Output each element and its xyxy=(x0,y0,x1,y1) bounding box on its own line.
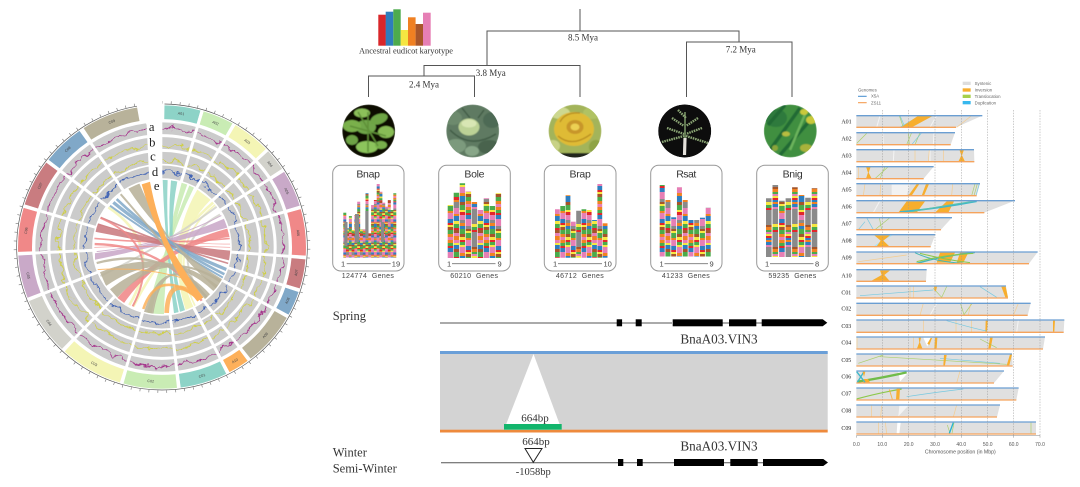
grey data rings xyxy=(41,128,283,366)
row A10: A10 xyxy=(841,274,852,280)
Bnap scale: 1 xyxy=(341,260,345,268)
x axis xyxy=(853,436,1045,455)
chromosome labels: A06 xyxy=(296,230,300,236)
Bnig scale: 8 xyxy=(815,260,819,268)
Bnig scale xyxy=(765,260,819,268)
row A07 xyxy=(841,218,952,230)
row C03 xyxy=(841,320,1064,332)
Rsat scale: 9 xyxy=(710,260,714,268)
tick mask at the open top gap xyxy=(137,97,162,108)
chromosome labels: A10 xyxy=(231,358,239,364)
outer chromosome band ring xyxy=(25,112,299,382)
row C07 xyxy=(841,388,1019,400)
legend: annotations: Syntenic xyxy=(975,81,992,86)
track letters a to e: e xyxy=(154,179,160,193)
label: ancestral eudicot karyotype: Ancestral eudicot karyotype xyxy=(359,46,453,55)
Bole scale: 1 xyxy=(447,260,451,268)
chromosome labels: A07 xyxy=(294,269,299,276)
x axis: 10.0 xyxy=(877,442,887,448)
Brap scale: 1 xyxy=(553,260,557,268)
Brap gene count: 46712 Genes xyxy=(556,273,604,280)
Bnig scale: 1 xyxy=(765,260,769,268)
Bole karyotype bars xyxy=(448,183,501,258)
Bnig title: Bnig xyxy=(783,168,803,180)
legend: genomes: Genomes xyxy=(858,88,877,93)
x axis: 30.0 xyxy=(930,442,940,448)
x axis: 60.0 xyxy=(1009,442,1019,448)
row A09: A09 xyxy=(841,256,852,262)
chromosome labels: C02 xyxy=(147,379,154,384)
panel: synteny chart xyxy=(841,81,1064,455)
legend: annotations xyxy=(963,81,1001,105)
panel: Brap xyxy=(544,165,616,280)
row C03: C03 xyxy=(841,324,851,330)
x axis: 50.0 xyxy=(983,442,993,448)
legend: annotations: Translocation xyxy=(975,94,1001,99)
gene model: Spring xyxy=(440,319,827,326)
Brap scale xyxy=(553,260,612,268)
chromosome labels: C04 xyxy=(45,319,52,327)
chromosome labels: A03 xyxy=(243,138,251,145)
Brap scale: 10 xyxy=(604,260,612,268)
row A01: A01 xyxy=(841,119,852,125)
x axis: 40.0 xyxy=(956,442,966,448)
row A04 xyxy=(841,167,934,179)
legend: genomes: X5A xyxy=(871,94,879,99)
row C05: C05 xyxy=(841,358,851,364)
Bnap gene count: 124774 Genes xyxy=(342,273,394,280)
icon: Bnig plant photo xyxy=(764,104,817,158)
Bnig gene count: 59235 Genes xyxy=(768,273,817,280)
phylogenetic tree xyxy=(368,9,792,97)
label: -1058bp: -1058bp xyxy=(516,467,551,478)
row C08 xyxy=(841,405,1000,417)
chromosome labels: C01 xyxy=(198,373,206,379)
Rsat karyotype bars xyxy=(660,185,711,256)
row C09: C09 xyxy=(841,426,851,432)
x axis: 0.0 xyxy=(853,442,860,448)
icon: Rsat plant photo xyxy=(658,104,711,158)
white radial gaps between chromosomes xyxy=(15,99,309,391)
row C04: C04 xyxy=(841,341,851,347)
tree divergence labels xyxy=(409,32,756,90)
Bnap title: Bnap xyxy=(356,168,380,180)
row A07: A07 xyxy=(841,221,852,227)
white insertion triangle xyxy=(504,354,562,430)
row C08: C08 xyxy=(841,409,851,415)
chromosome labels: A04 xyxy=(266,160,273,168)
Rsat title: Rsat xyxy=(676,168,696,180)
tree divergence labels: 8.5 Mya xyxy=(568,32,598,42)
Bole gene count: 60210 Genes xyxy=(450,273,499,280)
blue genome bar xyxy=(440,351,828,354)
panel: Rsat xyxy=(651,165,722,280)
chromosome labels: C05 xyxy=(25,272,31,279)
panel: Bnig xyxy=(757,165,828,280)
panel: circos plot xyxy=(15,97,309,392)
Bnig karyotype bars xyxy=(766,185,817,257)
row C01 xyxy=(841,286,1008,298)
row C09 xyxy=(841,422,1036,434)
chromosome labels: A05 xyxy=(283,187,290,195)
row A08: A08 xyxy=(841,238,852,244)
row A10 xyxy=(841,270,927,281)
row A05 xyxy=(841,184,980,196)
legend: genomes: ZS11 xyxy=(871,100,882,105)
row A09 xyxy=(841,252,1038,264)
row A06: A06 xyxy=(841,204,852,210)
chromosome labels: C09 xyxy=(108,119,116,125)
664bp segment label: 664bp xyxy=(521,412,549,424)
row C07: C07 xyxy=(841,392,851,398)
legend: annotations: Inversion xyxy=(975,88,993,93)
scale arc and ticks xyxy=(15,102,309,392)
Brap karyotype bars xyxy=(555,184,608,258)
chromosome labels xyxy=(24,111,300,384)
icon: ancestral eudicot karyotype bars xyxy=(378,9,431,46)
row C05 xyxy=(841,354,1013,366)
Bnap scale xyxy=(341,260,400,268)
Bnap karyotype bars xyxy=(343,184,396,258)
row A03: A03 xyxy=(841,153,852,159)
track letters a to e: c xyxy=(150,150,156,164)
label: gene name bottom: BnaA03.VIN3 xyxy=(680,438,758,454)
Rsat scale: 1 xyxy=(660,260,664,268)
Bole scale xyxy=(447,260,502,268)
row C02 xyxy=(841,303,1031,315)
row A08 xyxy=(841,235,935,247)
panel: Bole xyxy=(439,165,510,280)
legend: annotations: Duplication xyxy=(975,100,997,105)
chromosome labels: C08 xyxy=(64,146,72,153)
row C04 xyxy=(841,337,1045,349)
track letters a to e: d xyxy=(152,165,159,179)
row A03 xyxy=(841,150,974,162)
row A02 xyxy=(841,133,955,145)
x axis: 20.0 xyxy=(904,442,914,448)
Bnap scale: 19 xyxy=(392,260,400,268)
chromosome labels: A02 xyxy=(212,120,219,126)
green 664bp segment xyxy=(504,424,562,430)
synteny alignment xyxy=(440,351,828,432)
rows A10 to C09 xyxy=(841,270,1064,434)
Brap title: Brap xyxy=(570,168,591,180)
chromosome labels: C06 xyxy=(24,227,29,234)
row C02: C02 xyxy=(841,307,851,313)
chromosome labels: A08 xyxy=(284,297,291,304)
row C06: C06 xyxy=(841,374,851,380)
label: gene name top: BnaA03.VIN3 xyxy=(680,332,758,346)
row A04: A04 xyxy=(841,170,852,176)
track letters a to e: b xyxy=(149,136,155,150)
track letters a to e xyxy=(149,120,160,193)
row C06 xyxy=(841,371,1004,383)
chromosome labels: A09 xyxy=(262,332,269,339)
x axis: Chromosome position (in Mbp) xyxy=(925,449,996,455)
icon: insertion triangle xyxy=(525,448,542,462)
row C01: C01 xyxy=(841,290,851,296)
x axis: 70.0 xyxy=(1035,442,1045,448)
chromosome labels: C07 xyxy=(37,182,44,190)
tree divergence labels: 3.8 Mya xyxy=(476,68,506,78)
chromosome labels: A01 xyxy=(178,111,185,116)
Bole scale: 9 xyxy=(498,260,502,268)
gene model: Winter xyxy=(441,459,828,466)
heading: Spring: Spring xyxy=(333,309,367,323)
icon: Brap plant photo xyxy=(546,104,603,159)
row A02: A02 xyxy=(841,136,852,142)
Bole title: Bole xyxy=(464,168,485,180)
dashed position gridlines xyxy=(882,110,1040,436)
heading: Winter Semi-Winter: Winter xyxy=(333,446,368,460)
row A06 xyxy=(841,201,1015,213)
Rsat gene count: 41233 Genes xyxy=(662,273,710,280)
icon: Bnap plant photo xyxy=(342,104,395,158)
rows A01 to A09 xyxy=(841,116,1038,264)
row A05: A05 xyxy=(841,187,852,193)
icon: Bole plant photo xyxy=(444,104,501,158)
tree divergence labels: 2.4 Mya xyxy=(409,80,439,90)
Rsat scale xyxy=(660,260,714,268)
heading: Winter Semi-Winter: Semi-Winter xyxy=(333,462,398,476)
tree divergence labels: 7.2 Mya xyxy=(726,44,756,54)
label: insertion size: 664bp xyxy=(522,436,550,448)
row A01 xyxy=(841,116,982,127)
orange genome bar xyxy=(440,430,828,432)
data tracks: density lines xyxy=(41,128,283,366)
chord links xyxy=(94,180,230,314)
chromosome labels: C03 xyxy=(90,361,98,367)
track letters a to e: a xyxy=(149,120,155,134)
legend: genomes xyxy=(858,88,882,105)
panel: Bnap xyxy=(333,165,404,280)
